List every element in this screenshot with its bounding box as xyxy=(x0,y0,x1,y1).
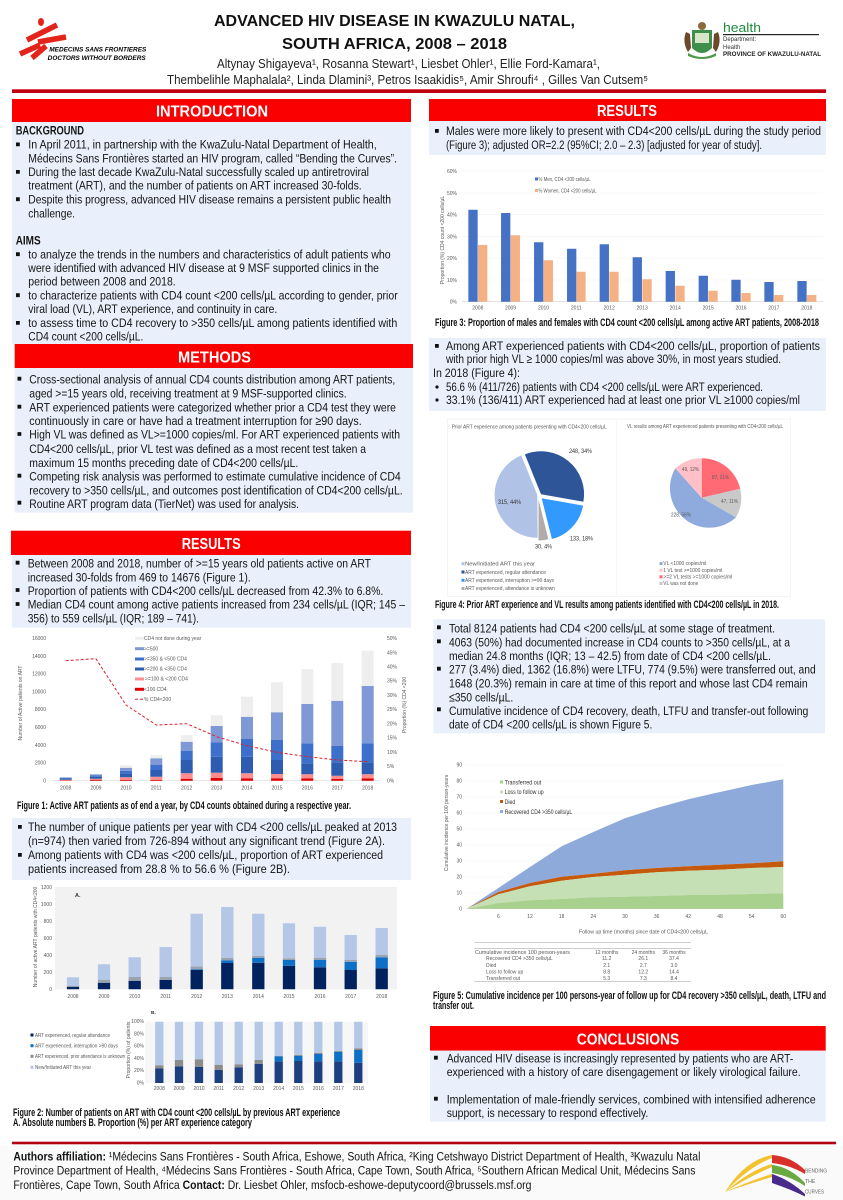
area: died xyxy=(467,861,783,909)
logo: KwaZulu-Natal Department of Health xyxy=(684,20,821,59)
table: cumulative incidence: Recovered CD4 >350 cells/µL xyxy=(486,956,553,962)
chart: figure 5 cumulative incidence xyxy=(444,763,786,982)
axis labels: 30% xyxy=(387,693,398,699)
logo: KwaZulu-Natal Department of Health: PROVINCE OF KWAZULU-NATAL xyxy=(723,52,821,58)
chart: figure 2B proportions xyxy=(30,1010,368,1092)
text block: background and aims: to characterize patients with CD4 count <200 cells/µL according to gender, prior xyxy=(28,288,398,302)
axis labels 3: 50% xyxy=(447,191,458,197)
pie: prior ART experience: 30, 4% xyxy=(535,544,552,550)
axis labels 5: 70 xyxy=(456,795,462,801)
caption: figure 2 xyxy=(13,1107,340,1129)
footer xyxy=(0,1142,843,1200)
axis labels: Number of Active patients on ART xyxy=(18,666,24,740)
axis labels: 2013 xyxy=(211,786,222,792)
text block: CD4 recovery outcomes xyxy=(433,619,825,733)
axis labels 2A: 2009 xyxy=(98,994,110,1000)
axis labels 2B: 2017 xyxy=(333,1086,344,1092)
heading: results right xyxy=(429,99,826,121)
axis labels 2A: 2011 xyxy=(160,994,171,1000)
stacked bars 2B xyxy=(159,1022,358,1083)
heading: results xyxy=(11,531,411,555)
legend: VL results: VL <1000 copies/ml xyxy=(663,561,706,567)
legend: CD4 not done during year xyxy=(144,636,202,642)
header xyxy=(12,13,826,93)
axis labels 2B: 2012 xyxy=(233,1086,244,1092)
axis labels 2B: 100% xyxy=(131,1019,145,1025)
text block: methods: Competing risk analysis was performed to estimate cumulative incidence of CD4 xyxy=(29,470,401,484)
axis labels 2B: 2016 xyxy=(313,1086,324,1092)
table: cumulative incidence: 8.8 xyxy=(603,969,610,975)
panel: results right xyxy=(429,99,826,1012)
axis labels: 20% xyxy=(387,722,398,728)
title xyxy=(214,13,575,53)
legend 3 xyxy=(535,177,597,194)
axis labels 5: 36 xyxy=(654,914,660,920)
axis labels 2B: Proportion (%) of patients xyxy=(126,1021,132,1078)
axis labels: 45% xyxy=(387,650,398,656)
logo: Bending the Curves: CURVES xyxy=(805,1190,824,1196)
legend: prior ART: ART experienced, attendance is unknown xyxy=(465,586,555,592)
pie: prior ART experience: Prior ART experience among patients presenting with CD4<200 cells/µL xyxy=(452,424,607,430)
axis labels 5: 60 xyxy=(456,811,462,817)
axis labels 5: 10 xyxy=(456,891,462,897)
legend: <100 CD4 xyxy=(144,687,167,693)
pie: VL results: 47, 11% xyxy=(721,499,739,505)
axis labels 3: 2013 xyxy=(637,306,648,312)
axis labels 5: Follow up time (months) since date of CD4<200 cells/µL xyxy=(579,930,708,936)
chart: figure 1 active ART patients by CD4 xyxy=(18,636,408,792)
text block: ART experienced xyxy=(429,338,826,411)
text block: results summary: increased 30-folds from 469 to 14676 (Figure 1). xyxy=(28,570,251,584)
pie: prior ART experience xyxy=(452,424,607,550)
axis labels: 35% xyxy=(387,679,398,685)
logo: Médecins Sans Frontières: MEDECINS SANS FRONTIERES xyxy=(49,46,147,54)
axis labels 3: 2018 xyxy=(801,306,813,312)
table: cumulative incidence: 12.2 xyxy=(638,969,648,975)
text block: methods: Cross-sectional analysis of annual CD4 counts distribution among ART patients, xyxy=(29,373,395,387)
text block: unique patients: patients increased from 28.8 % to 56.6 % (Figure 2B). xyxy=(28,862,290,876)
table: cumulative incidence: Loss to follow up xyxy=(486,969,523,975)
text block: background and aims: BACKGROUND xyxy=(16,124,84,138)
legend: prior ART: ART experienced, regular attendance xyxy=(465,570,546,576)
authors: Thembelihle Maphalala², Linda Dlamini³, Petros Isaakidis⁵, Amir Shroufi⁴ , Gilles Van Cutsem⁵ xyxy=(167,73,648,87)
axis labels: 50% xyxy=(387,636,398,642)
legend 2: ART experienced, interruption >90 days xyxy=(35,1044,118,1050)
pie: prior ART experience: 248, 34% xyxy=(569,448,592,455)
axis labels: 12000 xyxy=(32,672,46,678)
panel: methods xyxy=(15,344,413,513)
axis labels xyxy=(18,636,408,792)
axis labels: 2000 xyxy=(35,761,46,767)
legend: >=350 & <500 CD4 xyxy=(144,657,187,663)
table: cumulative incidence: 12 months xyxy=(595,950,619,956)
legend 2: ART experienced, prior attendance is unknown xyxy=(35,1054,125,1060)
table: cumulative incidence: 36 months xyxy=(662,950,686,956)
table: cumulative incidence xyxy=(474,942,691,982)
legend 3: % Men, CD4 <200 cells/µL xyxy=(538,177,591,183)
axis labels 2A: 2012 xyxy=(191,994,202,1000)
heading: results: RESULTS xyxy=(182,536,241,553)
axis labels: 6000 xyxy=(35,725,46,731)
text block: methods xyxy=(15,368,413,513)
axis labels 2B: 2014 xyxy=(273,1086,284,1092)
text block: unique patients xyxy=(12,818,411,880)
heading: results right: RESULTS xyxy=(597,103,657,120)
text block: methods: maximum 15 months preceding date of CD4<200 cells/µL. xyxy=(29,456,298,470)
axis labels 2B: 2008 xyxy=(154,1086,165,1092)
axis labels 2B: 2011 xyxy=(213,1086,224,1092)
axis labels 3: 2016 xyxy=(735,306,747,312)
text block: CD4 recovery outcomes: date of CD4 <200 cells/µL is shown Figure 5. xyxy=(449,718,652,732)
chart: figure 2A absolute numbers xyxy=(33,885,397,1000)
text block: methods: ART experienced patients were categorized whether prior a CD4 test they were xyxy=(29,400,396,414)
table: cumulative incidence: 8.4 xyxy=(671,976,678,982)
axis labels 5: 90 xyxy=(456,763,462,769)
text block: background and aims: Despite this progress, advanced HIV disease remains a persistent public health xyxy=(28,192,391,206)
axis labels: Proportion (%) CD4 <200 xyxy=(402,677,408,733)
table: cumulative incidence: 2.1 xyxy=(603,963,610,969)
logo: Médecins Sans Frontières: DOCTORS WITHOUT BORDERS xyxy=(48,55,146,62)
legend 5: Died xyxy=(505,799,515,806)
table: cumulative incidence: 37.4 xyxy=(669,956,679,962)
axis labels 3: 2010 xyxy=(538,306,549,312)
text block: results summary: Proportion of patients with CD4<200 cells/µL decreased from 42.3% to 6.8%. xyxy=(28,584,383,598)
stacked bars xyxy=(66,651,368,781)
logo: Bending the Curves xyxy=(725,1155,827,1196)
pie: VL results: 228, 56% xyxy=(671,513,692,519)
text block: unique patients: Among patients with CD4 was <200 cells/µL, proportion of ART experienced xyxy=(28,848,383,862)
axis labels 2B: 2010 xyxy=(193,1086,205,1092)
axis labels 2B xyxy=(126,1010,364,1092)
text block: background and aims: period between 2008 and 2018. xyxy=(28,275,176,289)
area: loss to follow up xyxy=(467,867,783,909)
axis labels 2A: 2008 xyxy=(67,994,79,1000)
axis labels 5: 50 xyxy=(456,827,462,833)
axis labels: 10000 xyxy=(32,689,46,695)
axis labels 2A: 400 xyxy=(44,953,52,959)
axis labels: 14000 xyxy=(32,654,46,660)
pie: VL results: 49, 12% xyxy=(682,467,700,473)
axis labels: 2012 xyxy=(181,786,192,792)
axis labels 2A: 2018 xyxy=(376,994,387,1000)
axis labels 5: 30 xyxy=(456,859,462,865)
text block: males CD4 xyxy=(429,121,826,155)
panel: introduction xyxy=(12,99,411,344)
bars: women xyxy=(483,235,812,302)
axis labels: 2014 xyxy=(241,786,253,792)
legend 5: Transferred out xyxy=(505,779,541,786)
table: cumulative incidence: 26.1 xyxy=(638,956,648,962)
logo: Médecins Sans Frontières xyxy=(20,18,147,62)
pie: prior ART experience: 315, 44% xyxy=(498,499,521,506)
table: cumulative incidence: 5.3 xyxy=(603,976,610,982)
area: recovered xyxy=(467,779,783,909)
text block: author affiliations: Province Department of Health, ⁴Médecins Sans Frontières - South Africa, Cape Town, South Africa, ⁵Southern African Medical Unit, Médecins Sans xyxy=(13,1164,695,1178)
axis labels 3: 2012 xyxy=(604,306,615,312)
axis labels 2A xyxy=(33,885,387,1000)
text block: unique patients: (n=974) then varied from 726-894 without any significant trend (Figure 2A). xyxy=(28,834,385,848)
axis labels 2B: 2013 xyxy=(253,1086,264,1092)
text block: CD4 recovery outcomes: ≤350 cells/µL. xyxy=(449,690,513,704)
chart: figure 3 males and females xyxy=(440,169,823,312)
legend: VL results: 1 VL test >=1000 copies/ml xyxy=(663,568,722,574)
legend: prior ART: New/Initiated ART this year xyxy=(465,562,535,568)
axis labels 3: 10% xyxy=(447,278,458,284)
axis labels 2B: 2018 xyxy=(353,1086,364,1092)
axis labels 2A: 2017 xyxy=(345,994,356,1000)
table: cumulative incidence: 2.7 xyxy=(640,963,647,969)
axis labels 3: 40% xyxy=(447,213,458,219)
axis labels 5: 48 xyxy=(717,914,723,920)
table: cumulative incidence: Cumulative incidence 100 person-years xyxy=(475,950,571,956)
text block: conclusions: support, is necessary to respond effectively. xyxy=(447,1106,648,1120)
axis labels: 0% xyxy=(387,778,395,784)
line: % CD4<200 xyxy=(66,659,368,762)
legend: >=200 & <350 CD4 xyxy=(144,667,187,673)
axis labels 5: 54 xyxy=(749,914,755,920)
legend 5: Recovered CD4 >350 cells/µL xyxy=(505,809,572,816)
legend 5 xyxy=(500,779,572,816)
legend: % CD4<200 xyxy=(144,697,171,703)
axis labels 2A: 600 xyxy=(44,936,52,942)
text block: background and aims xyxy=(12,122,411,344)
text block: ART experienced: 56.6 % (411/726) patients with CD4 <200 cells/µL were ART experienced. xyxy=(446,380,763,394)
axis labels 2A: 1000 xyxy=(41,902,52,908)
axis labels 2A: 200 xyxy=(44,970,52,976)
axis labels: 2009 xyxy=(90,786,102,792)
panel: conclusions xyxy=(430,1026,826,1122)
heading: introduction: INTRODUCTION xyxy=(156,104,268,120)
text block: results summary: Median CD4 count among active patients increased from 234 cells/µL (IQR; 145 – xyxy=(28,598,405,612)
panel: results left xyxy=(11,531,411,1129)
stacked bars 2A xyxy=(73,907,382,989)
text block: background and aims: Médecins Sans Frontières started an HIV program, called “Bending the Curves”. xyxy=(28,151,397,165)
legend: >=500 xyxy=(144,646,158,652)
axis labels 2A: 2016 xyxy=(314,994,326,1000)
axis labels: 2017 xyxy=(332,786,343,792)
legend: VL results: >=2 VL tests >=1000 copies/ml xyxy=(663,574,732,580)
text block: methods: recovery to >350 cells/µL, and outcomes post identification of CD4<200 cells/µL. xyxy=(29,483,403,497)
area: transferred out xyxy=(467,893,783,909)
legend 5: Loss to follow up xyxy=(505,789,544,796)
text block: background and aims: During the last decade KwaZulu-Natal successfully scaled up antiretroviral xyxy=(28,165,369,179)
axis labels 5: 24 xyxy=(591,914,596,920)
text block: background and aims: to assess time to CD4 recovery to >350 cells/µL among patients identified with xyxy=(28,316,397,330)
axis labels 5: 40 xyxy=(456,843,462,849)
caption: figure 2: Figure 2: Number of patients on ART with CD4 count <200 cells/µL by previous ART experience xyxy=(13,1107,340,1119)
text block: methods: continuously in care or have had a treatment interruption for ≥90 days. xyxy=(29,414,362,428)
pie: prior ART experience: 133, 18% xyxy=(570,536,593,542)
axis labels 5: 60 xyxy=(781,914,786,920)
axis labels: 2016 xyxy=(302,786,313,792)
axis labels 3: 2017 xyxy=(768,306,780,312)
axis labels 3: 30% xyxy=(447,234,458,240)
legend 2 xyxy=(30,1033,125,1071)
axis labels 3: 2011 xyxy=(571,306,582,312)
axis labels: 0 xyxy=(43,778,46,784)
text block: unique patients: The number of unique patients per year with CD4 <200 cells/µL peaked at 2013 xyxy=(28,820,397,834)
text block: background and aims: AIMS xyxy=(16,234,41,248)
legend: prior ART: ART experienced, interruption >=90 days xyxy=(465,578,554,584)
caption: figure 5: transfer out. xyxy=(433,1000,474,1012)
bars: men xyxy=(473,210,802,302)
axis labels 5: 20 xyxy=(456,875,462,881)
table: cumulative incidence: 11.2 xyxy=(602,956,612,962)
logo: Bending the Curves: THE xyxy=(805,1179,816,1185)
legend 2: ART experienced, regular attendance xyxy=(35,1033,110,1039)
text block: author affiliations: Frontières, Cape Town, South Africa Contact: Dr. Liesbet Ohler, msfocb-eshowe-deputycoord@brussels.msf.org xyxy=(13,1178,531,1192)
axis labels 3: 0% xyxy=(450,300,458,306)
text block: background and aims: CD4 count <200 cells/µL. xyxy=(28,330,143,344)
text block: results summary: Between 2008 and 2018, number of >=15 years old patients active on ART xyxy=(28,557,371,571)
axis labels 5: 18 xyxy=(559,914,565,920)
text block: background and aims: to analyze the trends in the numbers and characteristics of adult patients who xyxy=(28,247,391,261)
text block: conclusions xyxy=(430,1051,826,1122)
heading: introduction xyxy=(12,99,411,122)
text block: author affiliations xyxy=(13,1150,700,1192)
text block: author affiliations: Authors affiliation: ¹Médecins Sans Frontières - South Africa, Eshowe, South Africa, ²King Cetshwayo District Department of Health, ³Kwazulu Natal xyxy=(13,1150,700,1164)
heading: conclusions xyxy=(430,1026,826,1051)
axis labels 5: 42 xyxy=(686,914,691,920)
legend: prior ART xyxy=(462,562,555,592)
table: cumulative incidence: Died xyxy=(486,963,497,969)
pie: VL results: 87, 21% xyxy=(712,475,730,481)
axis labels 3: 60% xyxy=(447,169,458,175)
axis labels: 16000 xyxy=(32,636,46,642)
axis labels 5 xyxy=(444,763,786,936)
axis labels 2B: 2015 xyxy=(293,1086,304,1092)
logo: KwaZulu-Natal Department of Health: Department: xyxy=(723,37,756,43)
axis labels 2A: A. xyxy=(75,893,81,899)
axis labels: 25% xyxy=(387,707,398,713)
legend: >=100 & <200 CD4 xyxy=(145,677,188,683)
axis labels 3: 2009 xyxy=(505,306,516,312)
axis labels 3: 2015 xyxy=(703,306,714,312)
heading: methods xyxy=(15,344,413,368)
axis labels 5: 6 xyxy=(497,914,500,920)
axis labels 2A: Number of active ART patients with CD4<200 xyxy=(33,887,39,987)
axis labels: 5% xyxy=(387,764,395,770)
axis labels: 4000 xyxy=(35,743,46,749)
axis labels 2A: 2015 xyxy=(283,994,295,1000)
title: ADVANCED HIV DISEASE IN KWAZULU NATAL, xyxy=(214,13,575,30)
axis labels 2A: 2014 xyxy=(253,994,264,1000)
legend: VL results: VL was not done xyxy=(663,581,698,587)
heading: conclusions: CONCLUSIONS xyxy=(577,1032,680,1048)
text block: ART experienced: In 2018 (Figure 4): xyxy=(433,366,520,380)
text block: background and aims: viral load (VL), ART experience, and continuity in care. xyxy=(28,302,277,316)
axis labels 3: 2014 xyxy=(670,306,681,312)
legend 2: New/Initiated ART this year xyxy=(35,1065,91,1071)
text block: CD4 recovery outcomes: Total 8124 patients had CD4 <200 cells/µL at some stage of treatment. xyxy=(449,621,775,635)
axis labels 2B: 2009 xyxy=(173,1086,185,1092)
axis labels 5: 30 xyxy=(622,914,628,920)
axis labels: 40% xyxy=(387,664,398,670)
text block: background and aims: treatment (ART), and the number of patients on ART increased 30-folds. xyxy=(28,179,362,193)
table: cumulative incidence: Transferred out xyxy=(486,976,521,982)
axis labels: 2010 xyxy=(120,786,132,792)
authors xyxy=(167,57,648,87)
authors: Altynay Shigayeva¹, Rosanna Stewart¹, Liesbet Ohler¹, Ellie Ford-Kamara¹, xyxy=(217,57,600,71)
logo: KwaZulu-Natal Department of Health: Health xyxy=(723,45,740,51)
legend xyxy=(135,636,202,703)
table: cumulative incidence: 7.3 xyxy=(640,976,647,982)
logo: KwaZulu-Natal Department of Health: health xyxy=(723,20,761,35)
axis labels 5: 0 xyxy=(459,906,462,912)
text block: methods: CD4<200 cells/µL, prior VL test was defined as a most recent test taken a xyxy=(29,442,366,456)
axis labels 2B: 20% xyxy=(134,1068,145,1074)
text block: methods: Routine ART program data (TierNet) was used for analysis. xyxy=(29,497,299,511)
text block: methods: aged >=15 years old, receiving treatment at 9 MSF-supported clinics. xyxy=(29,386,347,400)
text block: results summary: 356) to 559 cells/µL (IQR; 189 – 741). xyxy=(28,611,199,625)
axis labels 2A: 800 xyxy=(44,919,52,925)
logo: Bending the Curves: BENDING xyxy=(805,1168,827,1174)
text block: background and aims: were identified with advanced HIV disease at 9 MSF supported clinics in the xyxy=(27,261,379,275)
axis labels 3: 2008 xyxy=(472,306,484,312)
axis labels 3: 20% xyxy=(447,256,458,262)
axis labels 5: 12 xyxy=(527,914,533,920)
axis labels 2B: 60% xyxy=(134,1044,145,1050)
text block: CD4 recovery outcomes: median 24.8 months (IQR; 13 – 42.5) from date of CD4 <200 cells/µL. xyxy=(449,649,771,663)
pie: VL results xyxy=(627,424,783,528)
table: cumulative incidence: 14.4 xyxy=(669,969,679,975)
chart: figure 4 pies xyxy=(448,419,790,596)
axis labels 2B: 80% xyxy=(134,1031,145,1037)
table: cumulative incidence: 24 months xyxy=(632,950,655,956)
text block: results summary xyxy=(12,555,411,628)
title: SOUTH AFRICA, 2008 – 2018 xyxy=(282,36,507,53)
axis labels 2A: 1200 xyxy=(41,885,52,891)
axis labels: 8000 xyxy=(35,707,46,713)
axis labels 2B: 40% xyxy=(134,1056,145,1062)
axis labels 3 xyxy=(440,169,813,312)
axis labels 3: Proportion (%) CD4 count <200 cells/µL xyxy=(440,196,446,284)
axis labels 5: Cumulative incidence per 100 person-years xyxy=(444,774,450,871)
axis labels: 2015 xyxy=(271,786,283,792)
axis labels: 2011 xyxy=(151,786,162,792)
axis labels 2B: B. xyxy=(151,1010,156,1016)
heading: methods: METHODS xyxy=(178,350,251,366)
legend: VL results xyxy=(660,561,732,587)
table: cumulative incidence: 3.0 xyxy=(671,963,678,969)
axis labels: 10% xyxy=(387,750,398,756)
axis labels: 15% xyxy=(387,736,398,742)
pie: VL results: VL results among ART experienced patients presenting with CD4<200 cells/µL xyxy=(627,424,783,430)
text block: background and aims: challenge. xyxy=(28,206,75,220)
axis labels 2A: 2010 xyxy=(129,994,140,1000)
text block: background and aims: In April 2011, in partnership with the KwaZulu-Natal Department of Health, xyxy=(28,138,377,152)
text block: methods: High VL was defined as VL>=1000 copies/ml. For ART experienced patients with xyxy=(29,428,400,442)
axis labels: 2018 xyxy=(362,786,373,792)
axis labels: 2008 xyxy=(60,786,71,792)
caption: figure 5 xyxy=(433,990,826,1012)
axis labels 5: 80 xyxy=(456,779,462,785)
axis labels 2A: 2013 xyxy=(222,994,233,1000)
legend 3: % Women, CD4 <200 cells/µL xyxy=(538,188,597,194)
axis labels 2B: 0% xyxy=(137,1080,145,1086)
axis labels 2A: 0 xyxy=(49,987,52,993)
caption: figure 2: A. Absolute numbers B. Proportion (%) per ART experience category xyxy=(13,1117,252,1129)
caption: figure 1: Figure 1: Active ART patients as of end a year, by CD4 counts obtained during a respective year. xyxy=(17,800,351,812)
